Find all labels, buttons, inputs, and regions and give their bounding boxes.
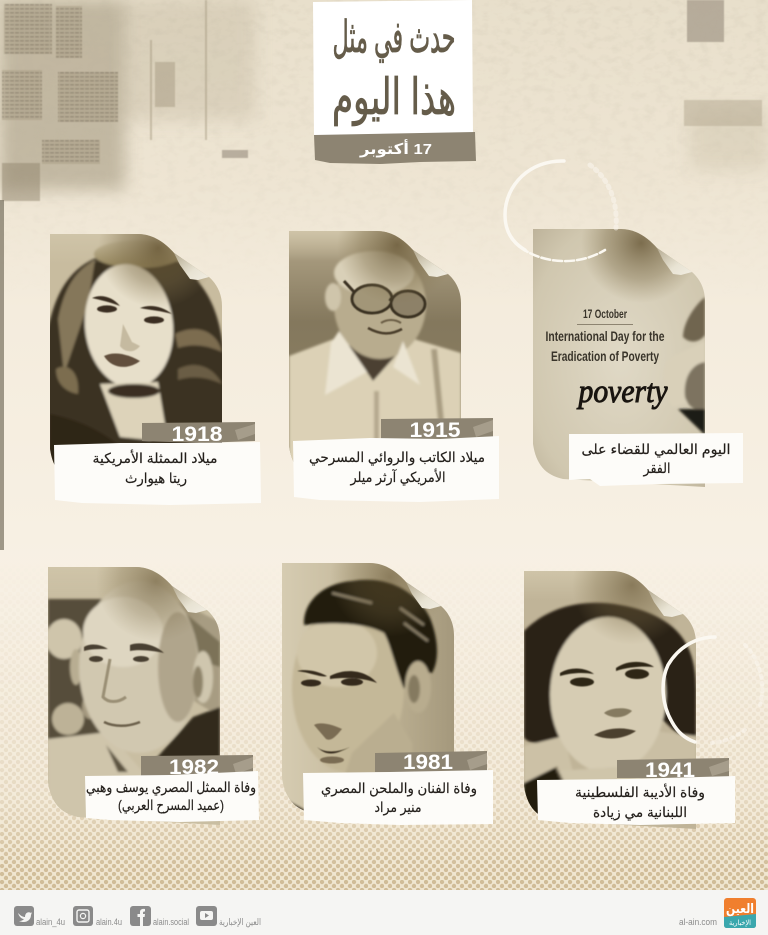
photo: May Ziadeh — [522, 569, 702, 834]
card: Arthur Miller — [287, 229, 499, 502]
year 1981: 1981 — [403, 751, 453, 774]
year ribbon 1941 — [617, 758, 729, 778]
year ribbon 1915 — [381, 418, 493, 440]
caption panel — [303, 770, 493, 825]
coffee ring stain bottom — [663, 637, 762, 743]
label: alain.social: alain.social — [153, 917, 189, 927]
label: alain.4u: alain.4u — [96, 917, 122, 927]
poster line — [577, 324, 633, 325]
card: Youssef Wahbi — [46, 565, 259, 830]
year ribbon 1918 — [142, 422, 255, 443]
caption text: منير مراد — [374, 799, 422, 816]
logo — [724, 898, 756, 928]
photo: Arthur Miller — [289, 231, 461, 462]
poster title: International Day for the — [546, 328, 665, 344]
card: International Day for the Eradication of Poverty — [531, 227, 743, 492]
footer bar — [0, 890, 768, 935]
caption panel — [537, 776, 735, 825]
caption text — [86, 779, 256, 814]
caption text: الأمريكي آرثر ميلر — [350, 468, 446, 486]
caption text: الفقر — [643, 460, 670, 477]
caption panel — [569, 433, 743, 486]
date text: 17 أكتوبر — [359, 139, 432, 158]
caption text — [575, 783, 705, 821]
caption text: وفاة الأديبة الفلسطينية — [575, 783, 705, 801]
icon: instagram — [73, 906, 93, 926]
facial features — [92, 296, 172, 367]
year ribbon 1982 — [141, 755, 253, 777]
caption text — [92, 449, 218, 487]
card: Mounir Mourad — [280, 561, 493, 826]
year 1982: 1982 — [169, 756, 219, 779]
year 1915: 1915 — [410, 419, 461, 442]
icon: twitter — [14, 906, 34, 926]
label: al-ain.com: al-ain.com — [679, 917, 717, 928]
label: alain_4u: alain_4u — [36, 917, 65, 927]
year 1941: 1941 — [645, 759, 695, 782]
poster title — [546, 328, 665, 364]
photo: Youssef Wahbi — [46, 565, 226, 830]
photo: poverty poster — [531, 227, 711, 492]
icon: facebook — [130, 906, 151, 926]
caption text — [321, 780, 477, 816]
icon: youtube — [196, 906, 217, 926]
caption text: وفاة الفنان والملحن المصري — [321, 780, 477, 797]
logo: العين — [726, 902, 754, 917]
title background — [313, 0, 473, 138]
caption text — [309, 449, 485, 486]
date ribbon — [314, 132, 476, 164]
caption text: اليوم العالمي للقضاء على — [582, 441, 730, 458]
facial features — [84, 643, 164, 726]
card: May Ziadeh — [522, 569, 735, 834]
caption text: اللبنانية مي زيادة — [593, 804, 687, 821]
title line 2: هذا اليوم — [332, 69, 456, 126]
coffee ring stain top — [505, 161, 616, 261]
facial features — [297, 670, 377, 764]
title line 1: حدث في مثل — [332, 13, 456, 63]
logo: الإخبارية — [729, 919, 751, 927]
caption text: ميلاد الكاتب والروائي المسرحي — [309, 449, 485, 466]
poster date: 17 October — [583, 307, 627, 321]
caption text: ريتا هيوارث — [125, 470, 187, 487]
photo: Mounir Mourad — [282, 563, 454, 810]
facial features — [560, 662, 654, 738]
caption text: (عميد المسرح العربي) — [118, 797, 224, 814]
glasses and smile — [344, 281, 425, 333]
caption panel — [293, 436, 499, 502]
title panel — [313, 0, 476, 164]
caption text: وفاة الممثل المصري يوسف وهبي — [86, 779, 256, 796]
caption panel — [85, 771, 259, 822]
poster title: Eradication of Poverty — [551, 348, 659, 364]
photo: Rita Hayworth — [50, 234, 222, 465]
year 1918: 1918 — [172, 423, 223, 446]
caption text: ميلاد الممثلة الأمريكية — [92, 449, 218, 467]
caption panel — [54, 442, 261, 505]
year ribbon 1981 — [375, 751, 487, 772]
label: al-ain news: العين الإخبارية — [219, 917, 261, 928]
card: Rita Hayworth — [45, 232, 261, 505]
fingers — [677, 296, 705, 434]
handwritten word: poverty — [577, 374, 668, 410]
caption text — [582, 441, 730, 477]
